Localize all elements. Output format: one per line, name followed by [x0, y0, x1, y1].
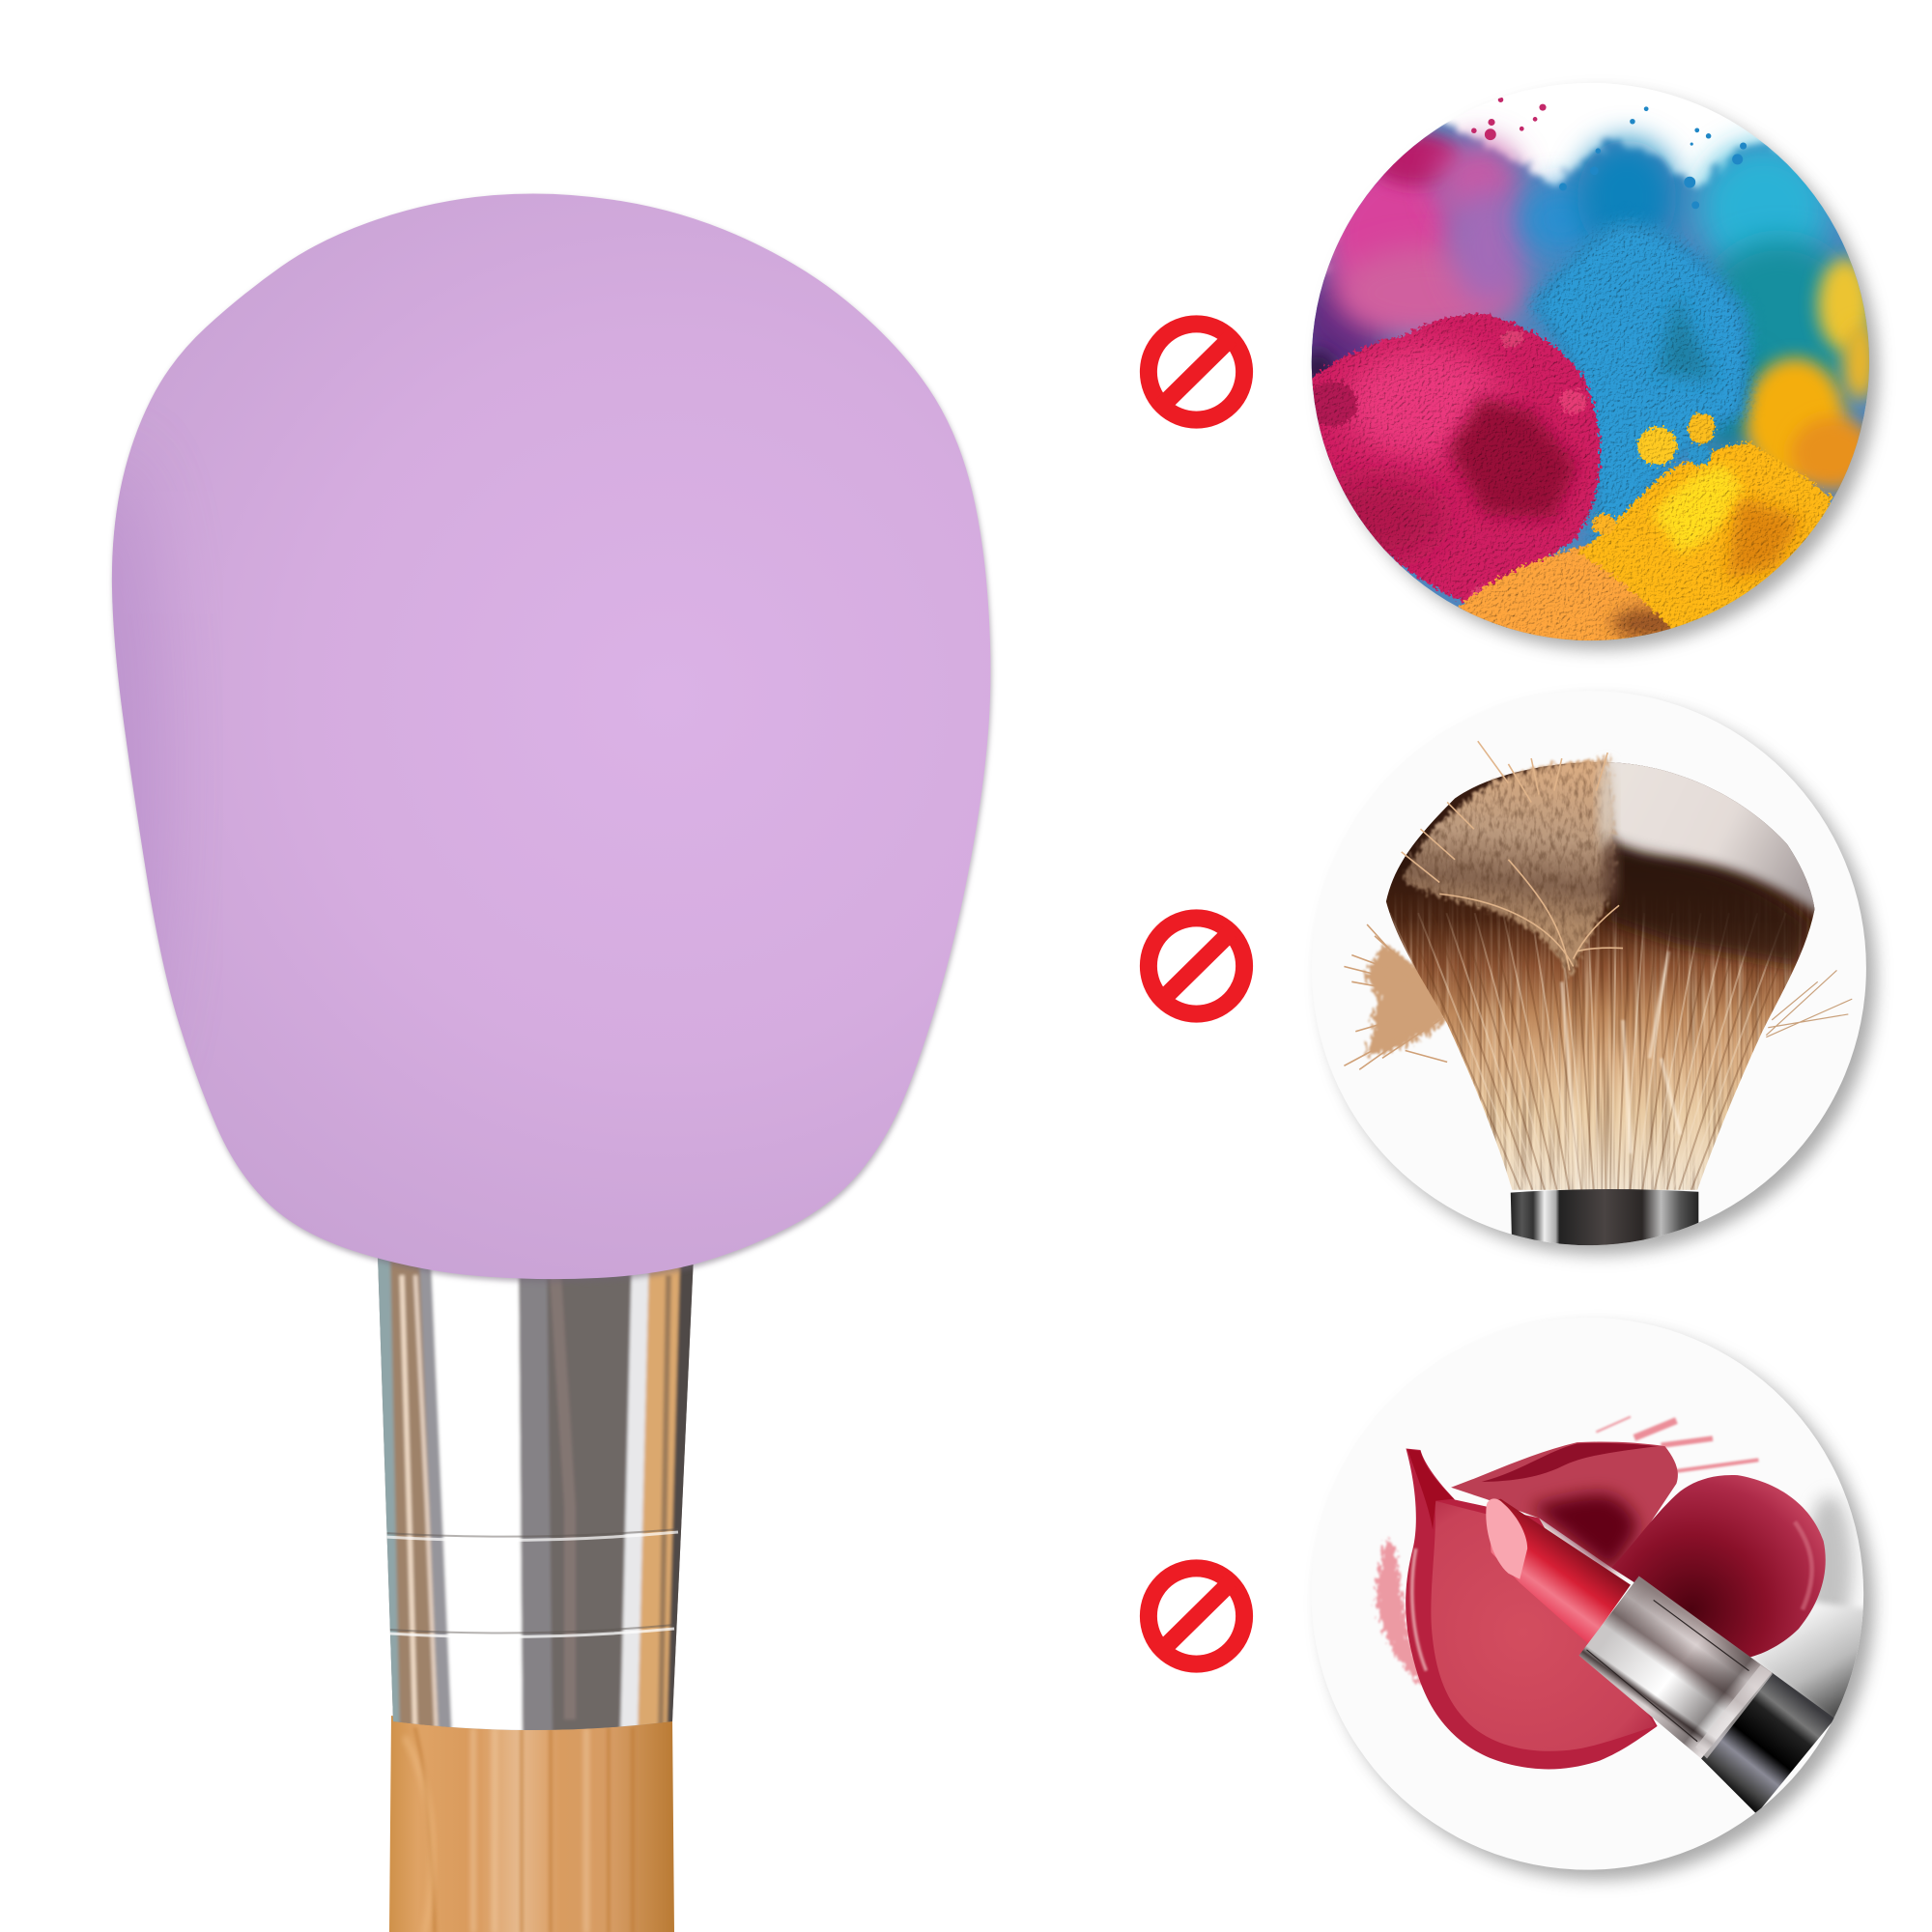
left frayed tuft	[1344, 924, 1455, 1069]
tan frayed top	[1402, 756, 1619, 978]
silicone cover	[53, 184, 1005, 1294]
yellow and orange cloud	[1746, 259, 1877, 490]
stray hairs	[1402, 741, 1852, 1037]
brush ferrule	[1511, 1189, 1698, 1246]
silicone cover shadow	[113, 196, 991, 1282]
bristle fan lines	[1390, 913, 1800, 1190]
prohibition icon: bristles	[1149, 918, 1244, 1014]
lipstick smear	[1377, 1417, 1826, 1769]
smoke base layer	[1302, 125, 1883, 667]
right smear lobe	[1611, 1475, 1826, 1658]
upper smear	[1451, 1442, 1678, 1568]
brush bristles	[1371, 753, 1830, 1196]
lipstick base	[1701, 1673, 1834, 1814]
prohibition icon: powder	[1149, 324, 1244, 420]
panel: coloured powder circle	[1291, 68, 1893, 667]
pink and purple smoke	[1291, 132, 1527, 388]
lipstick	[1486, 1498, 1834, 1814]
dark band between tips	[1611, 844, 1810, 967]
brush wooden handle	[389, 1710, 675, 1932]
lipstick bullet	[1488, 1499, 1631, 1644]
makeup brush with silicone cover	[53, 184, 1005, 1932]
lipstick cast shadow	[1749, 1495, 1875, 1724]
white bristle tips	[1594, 762, 1814, 918]
main smear body	[1406, 1448, 1658, 1769]
orange and yellow powder pile	[1458, 412, 1833, 641]
lipstick tip	[1486, 1498, 1527, 1579]
panel: frayed bristles circle	[1294, 676, 1893, 1275]
bristle streaks	[1395, 900, 1808, 1190]
blue and teal smoke	[1520, 140, 1863, 449]
powder particles	[1471, 97, 1747, 209]
smear streaks	[1377, 1417, 1758, 1690]
blue powder pile	[1523, 216, 1755, 564]
panel: lipstick smear circle	[1294, 1304, 1893, 1903]
pink powder pile	[1312, 312, 1603, 604]
brush metal ferrule	[372, 1256, 700, 1739]
lipstick sleeve	[1579, 1577, 1772, 1759]
prohibition icon: lipstick	[1149, 1568, 1244, 1664]
